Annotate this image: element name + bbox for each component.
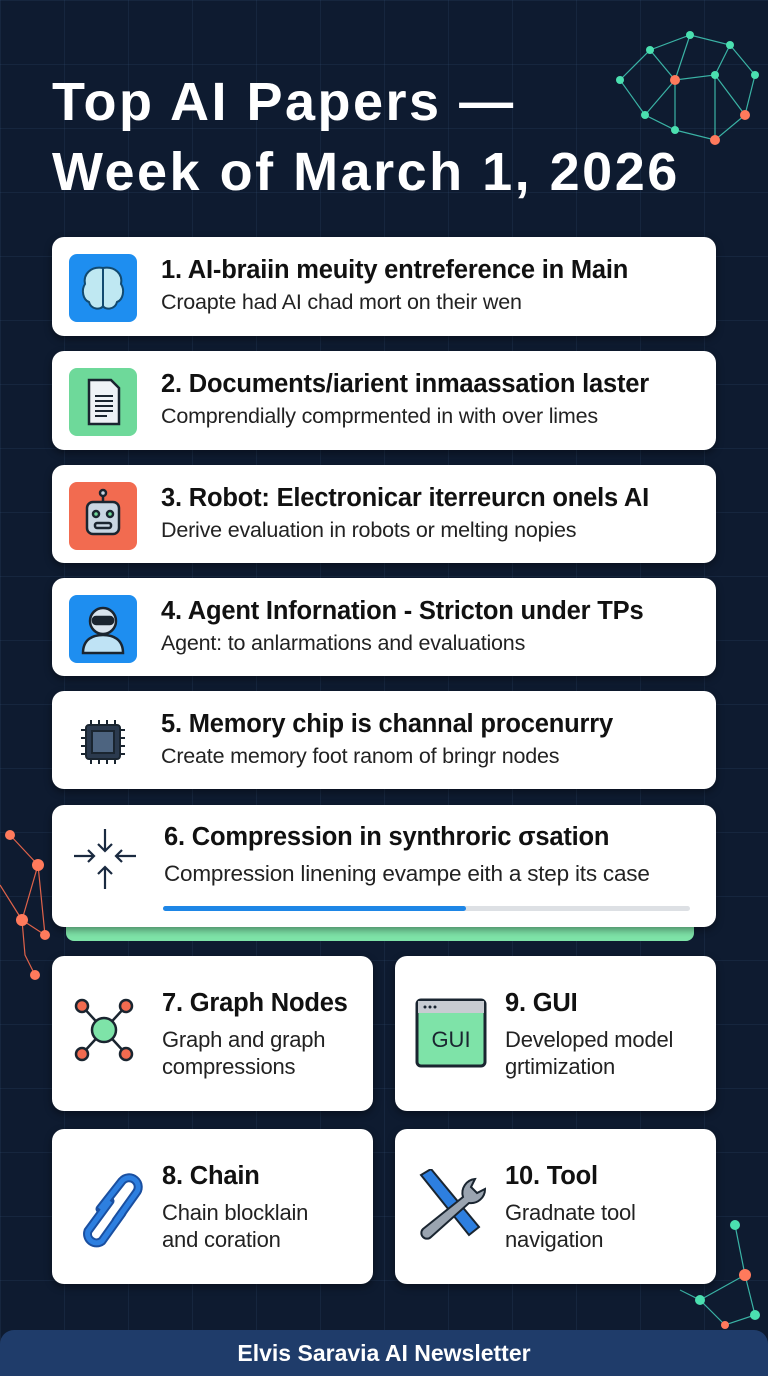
card 6: 6. Compression in synthroric σsation: [164, 823, 609, 851]
icon: brain: [69, 254, 137, 322]
title: [52, 72, 680, 202]
decoration: neural net bottom right: [680, 1220, 760, 1329]
card 10: 10. Tool: [505, 1162, 598, 1190]
progress bar: [163, 906, 690, 911]
card 2: 2. Documents/iarient inmaassation laster: [161, 370, 649, 398]
card 7: [52, 956, 373, 1111]
icon: agent: [69, 595, 137, 663]
card 8: [52, 1129, 373, 1284]
card 5: [52, 691, 716, 789]
card 8: 8. Chain: [162, 1162, 260, 1190]
card 6: [52, 805, 716, 927]
card 3: Derive evaluation in robots or melting nopies: [161, 518, 576, 542]
card 1: 1. AI-braiin meuity entreference in Main: [161, 256, 628, 284]
card 5: Create memory foot ranom of bringr nodes: [161, 744, 559, 768]
decoration: neural net left: [0, 830, 50, 980]
green strip under card 6: [66, 900, 694, 941]
card 9: Developed model grtimization: [505, 1027, 673, 1079]
icon: document: [69, 368, 137, 436]
card 3: 3. Robot: Electronicar iterreurcn onels AI: [161, 484, 649, 512]
card 4: [52, 578, 716, 676]
card 3: [52, 465, 716, 563]
card 1: Croapte had AI chad mort on their wen: [161, 290, 522, 314]
decoration: neural net top right: [616, 31, 759, 145]
title: Week of March 1, 2026: [52, 142, 680, 202]
icon: chip: [81, 720, 125, 764]
footer: Elvis Saravia AI Newsletter: [237, 1340, 531, 1366]
card 7: Graph and graph compressions: [162, 1027, 325, 1079]
card 9: 9. GUI: [505, 989, 578, 1017]
icon: GUI window: [416, 998, 486, 1068]
card 7: 7. Graph Nodes: [162, 989, 348, 1017]
card 4: Agent: to anlarmations and evaluations: [161, 631, 525, 655]
card 10: [395, 1129, 716, 1284]
card 1: [52, 237, 716, 336]
card 2: Comprendially comprmented in with over limes: [161, 404, 598, 428]
title: Top AI Papers —: [52, 72, 516, 132]
icon: GUI window: GUI: [431, 1027, 471, 1052]
card 2: [52, 351, 716, 450]
card 9: [395, 956, 716, 1111]
icon: tools: [420, 1169, 486, 1240]
footer: [0, 1330, 768, 1376]
card 10: Gradnate tool navigation: [505, 1200, 636, 1252]
card 5: 5. Memory chip is channal procenurry: [161, 710, 613, 738]
icon: robot: [69, 482, 137, 550]
icon: graph nodes: [74, 998, 134, 1062]
icon: compression arrows: [74, 829, 136, 889]
card 6: Compression linening evampe eith a step its case: [164, 861, 650, 886]
card 4: 4. Agent Infornation - Stricton under TPs: [161, 597, 643, 625]
icon: chain: [83, 1173, 143, 1248]
card 8: Chain blocklain and coration: [162, 1200, 308, 1252]
